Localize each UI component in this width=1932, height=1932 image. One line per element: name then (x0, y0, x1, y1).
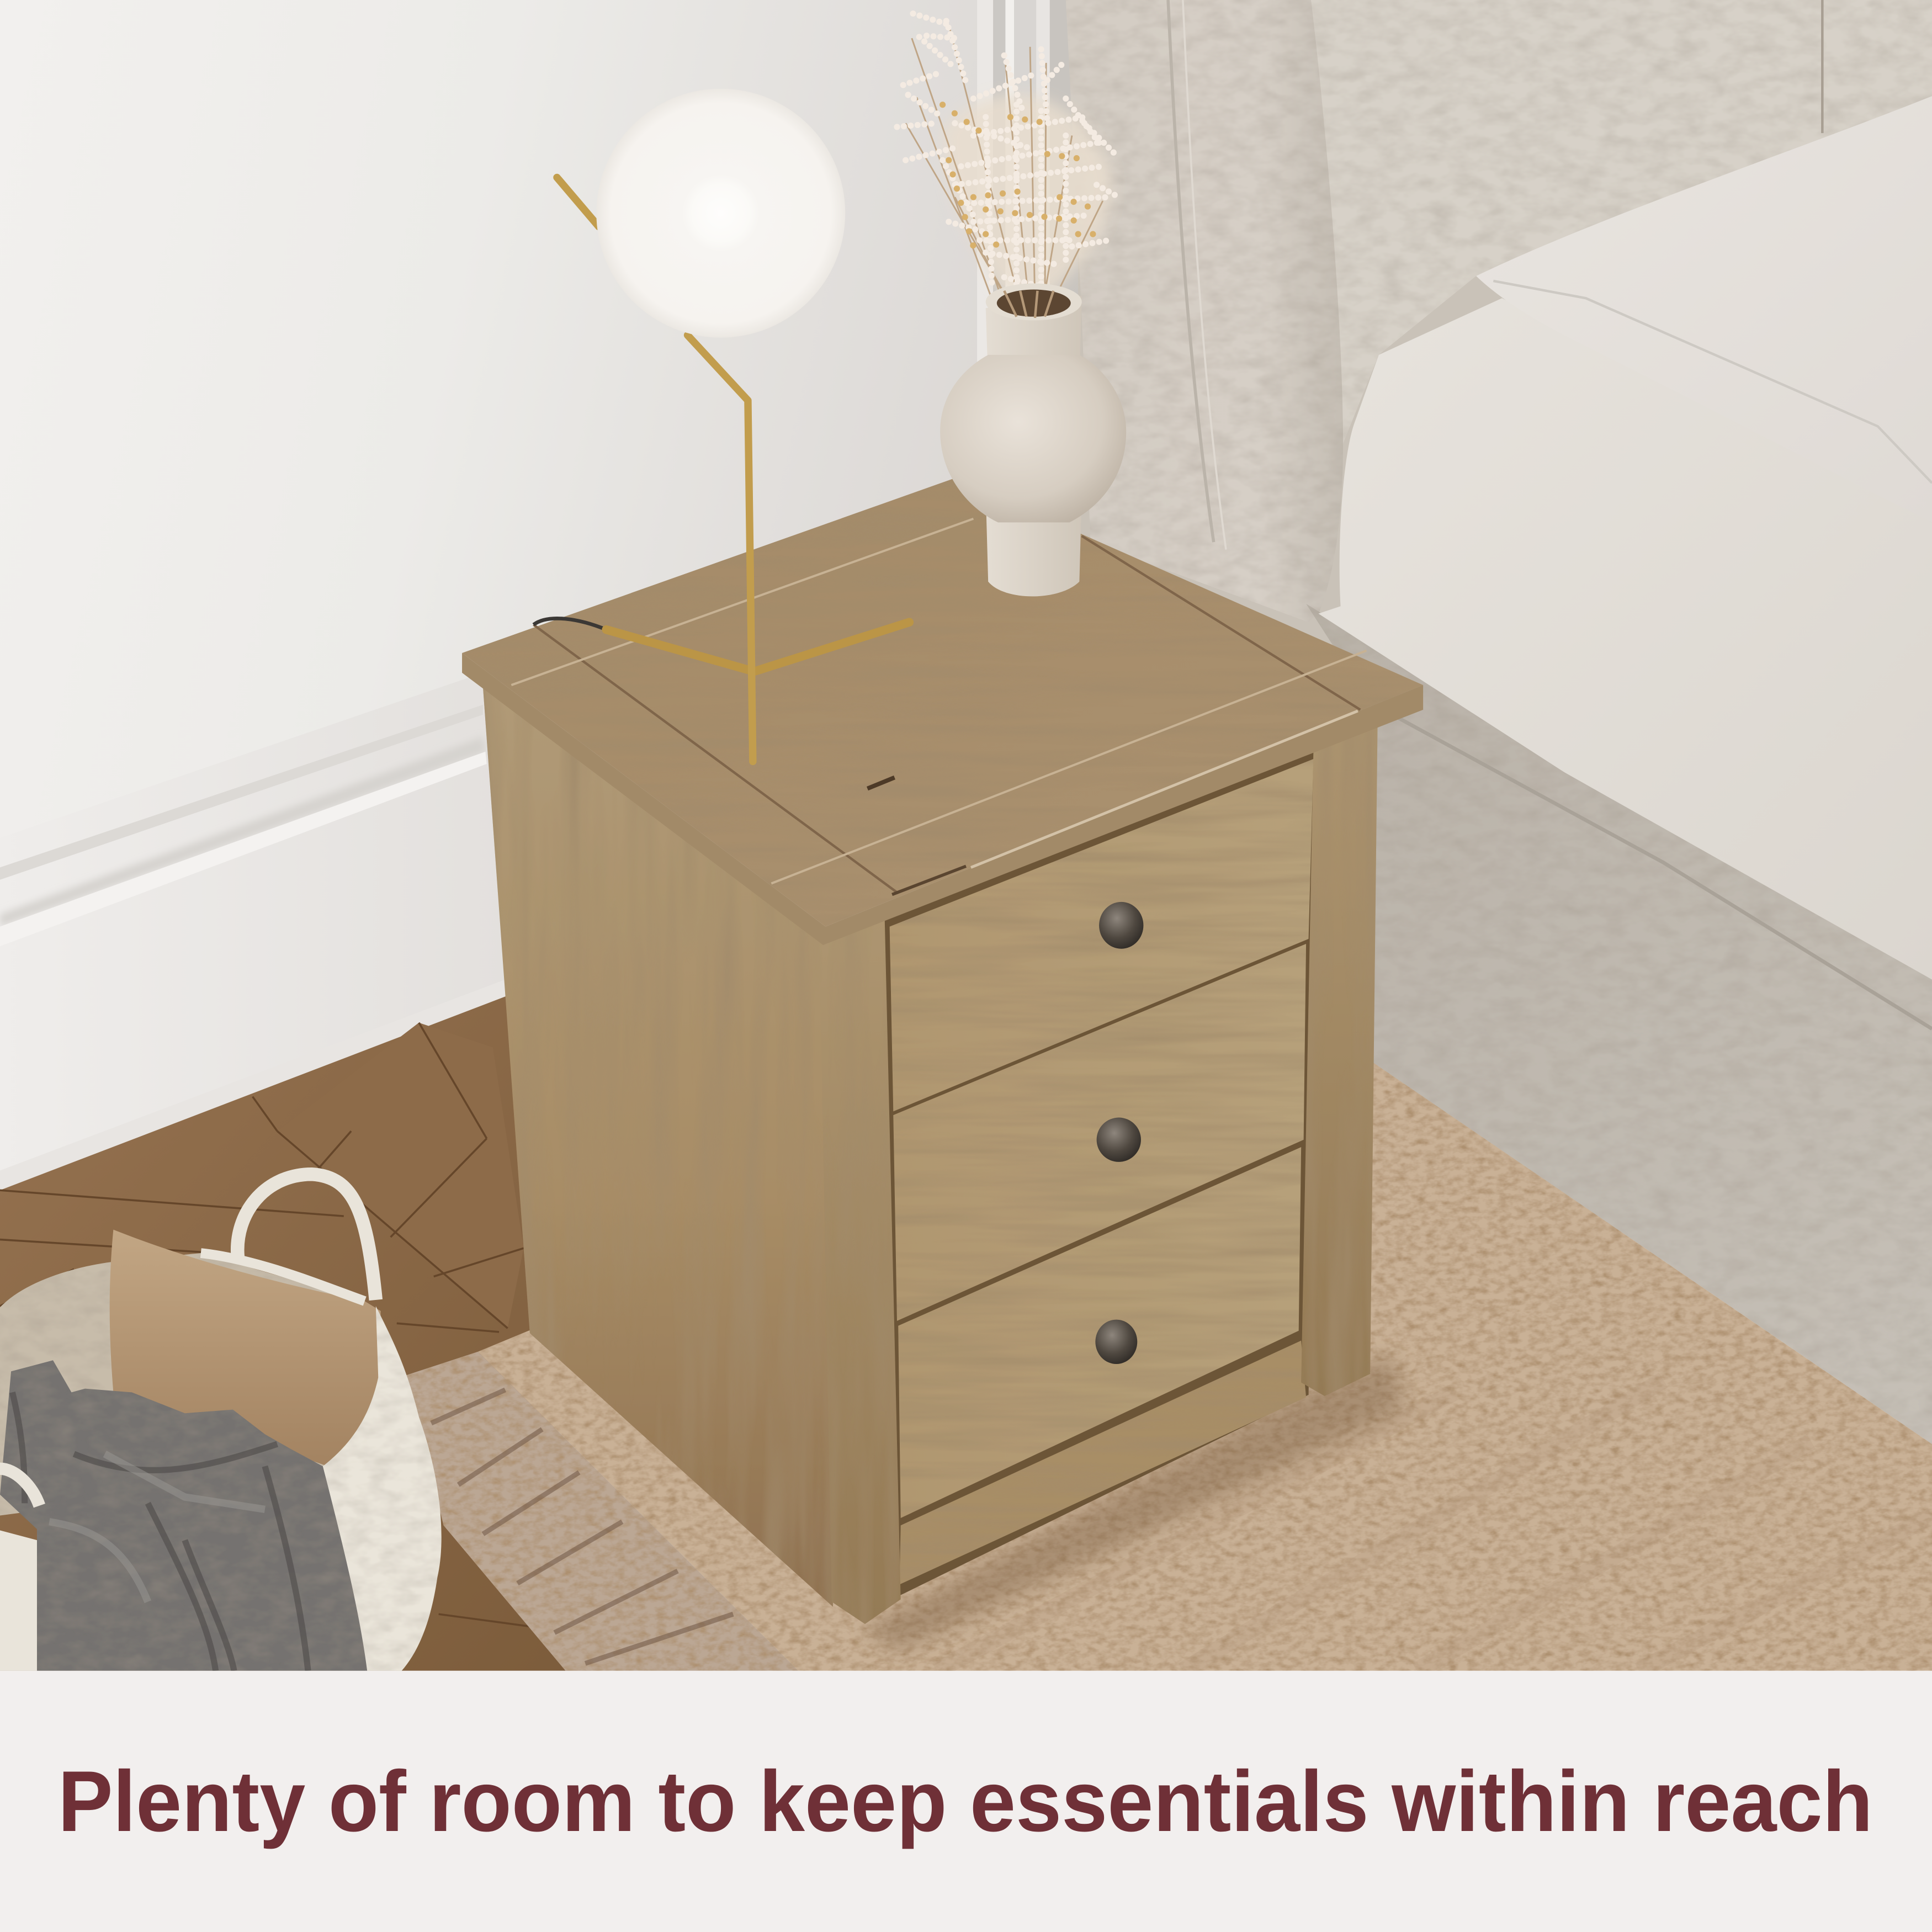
drawer knob 2 (1097, 1118, 1141, 1162)
rug fringe (407, 1352, 798, 1671)
lamp cord (534, 618, 606, 630)
flower stems (906, 25, 1103, 317)
vase foot (986, 493, 1082, 596)
bottom rail (899, 1341, 1306, 1585)
throw folds (12, 1392, 308, 1671)
throw highlight (49, 1454, 265, 1602)
lamp stem (557, 177, 753, 761)
nightstand (462, 478, 1423, 1651)
skirting board (0, 673, 508, 1193)
basket rim (201, 1253, 365, 1301)
grey throw (0, 1360, 367, 1671)
drawer 3 (898, 1147, 1301, 1518)
ceramic vase (940, 283, 1126, 596)
nightstand shadow (862, 1355, 1405, 1651)
pillow seam (1493, 281, 1932, 483)
woven basket front (323, 1306, 442, 1671)
drawer 2 (893, 944, 1306, 1321)
headboard upper panel (1294, 0, 1932, 444)
left side panel (483, 688, 833, 1607)
bed base seam (1392, 715, 1932, 1029)
woven basket back (0, 1253, 383, 1516)
jute rug (478, 1057, 1932, 1671)
dried flowers (897, 14, 1119, 317)
herringbone wood floor (0, 996, 591, 1671)
vase neck (986, 296, 1082, 382)
lamp globe (596, 89, 845, 338)
front right leg (1301, 727, 1378, 1396)
bed base (1306, 604, 1932, 1444)
table lamp (534, 89, 909, 761)
basket left band (0, 1530, 37, 1671)
table top edge (462, 653, 1423, 945)
headboard backing (1078, 0, 1932, 1232)
caption band (0, 1671, 1932, 1932)
stems in the vase (1004, 291, 1053, 318)
drawer knob 3 (1095, 1320, 1137, 1364)
flower haze (943, 94, 1111, 296)
wall (0, 0, 1087, 1208)
basket small handle (0, 1469, 39, 1506)
vase mouth (986, 283, 1082, 320)
drawer knob 1 (1099, 902, 1143, 949)
mattress (1318, 298, 1932, 980)
table top (462, 478, 1423, 927)
front recess (882, 745, 1318, 1597)
plank lines (534, 536, 1360, 893)
basket handle (237, 1174, 376, 1300)
lamp feet (606, 622, 909, 672)
pillow (1476, 96, 1932, 522)
drawer 1 (890, 759, 1313, 1111)
vase body (940, 355, 1126, 522)
golden blossoms (943, 105, 1103, 246)
headboard wing (1066, 0, 1822, 622)
tan cushion (110, 1230, 381, 1466)
wood knot (867, 777, 895, 789)
caption text: Plenty of room to keep essentials within reach (58, 1754, 1873, 1850)
front left leg (819, 918, 901, 1624)
flower blossoms (897, 14, 1119, 302)
